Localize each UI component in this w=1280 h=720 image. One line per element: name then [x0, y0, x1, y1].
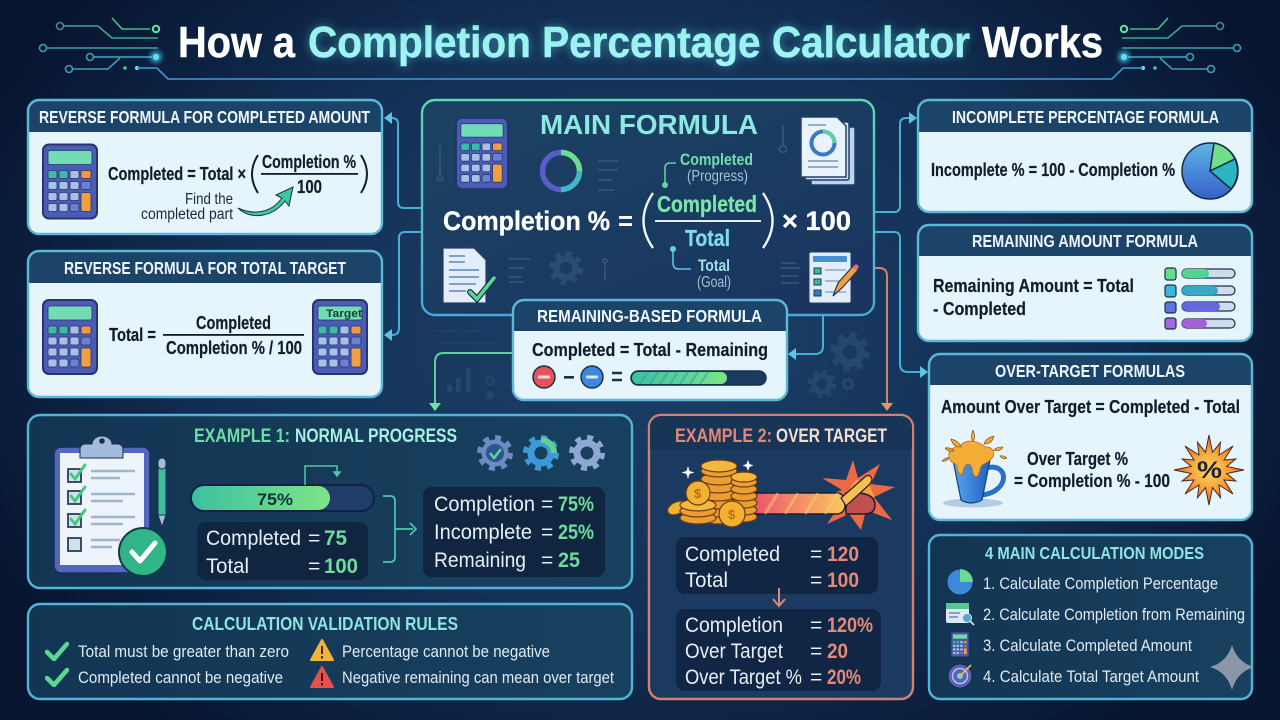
values box: results: 20: [827, 640, 848, 663]
completed callout: [662, 150, 753, 188]
arrow: down: [773, 588, 785, 606]
panel: over-target formulas: [929, 354, 1252, 520]
rule: percentage not negative: Percentage cannot be negative: [342, 642, 550, 661]
connector arrow: main to over-target: [874, 232, 928, 378]
rule: negative remaining: Negative remaining can mean over target: [342, 668, 614, 687]
values box: results: =: [541, 549, 553, 572]
values box: results: Over Target: [685, 640, 783, 663]
values box: results: 75%: [558, 493, 594, 516]
values box: inputs: =: [308, 527, 320, 550]
icon: green check badge: [119, 528, 167, 576]
title: How a: [178, 18, 295, 67]
heading: 4 MAIN CALCULATION MODES: [985, 543, 1204, 563]
values box: results: =: [541, 521, 553, 544]
arrow: small bar connector: [305, 466, 340, 485]
icon: percent burst: %: [1197, 457, 1222, 484]
values box: inputs: Completed: [206, 527, 301, 550]
main formula expression: [443, 191, 851, 251]
values box: inputs: 120: [827, 543, 859, 566]
panel: reverse formula for total target: [28, 251, 382, 397]
title: Completion Percentage Calculator: [308, 18, 970, 67]
panel heading: OVER-TARGET FORMULAS: [995, 361, 1185, 381]
heading: MAIN FORMULA: [540, 109, 758, 140]
heading: CALCULATION VALIDATION RULES: [192, 614, 458, 634]
connector arrow: main to incomplete: [874, 112, 917, 212]
panel heading: REVERSE FORMULA FOR TOTAL TARGET: [64, 258, 346, 278]
formula: Completed = Total - Remaining: [532, 340, 768, 360]
progress bar: [631, 371, 766, 385]
values box: results: =: [810, 614, 822, 637]
faint decoration lines: [438, 125, 800, 283]
panel heading: REMAINING-BASED FORMULA: [537, 306, 762, 326]
icon: explosion: [822, 460, 895, 530]
panel heading: REVERSE FORMULA FOR COMPLETED AMOUNT: [39, 107, 370, 127]
formula: Remaining Amount = Total: [933, 276, 1134, 296]
values box: results: 120%: [827, 614, 873, 637]
values box: results: Completion: [434, 493, 535, 516]
title: Completion Percentage Calculator: [308, 18, 970, 67]
main formula expression: =: [618, 206, 633, 236]
formula: 100: [297, 177, 322, 197]
connector arrow: main to example 2: [875, 268, 893, 411]
formula: Over Target %: [1027, 449, 1128, 469]
mode 3: 3. Calculate Completed Amount: [983, 636, 1192, 655]
faint background gears and chart: [435, 331, 867, 399]
main formula expression: × 100: [782, 206, 851, 236]
annotation: [141, 191, 234, 223]
panel: example 1 normal progress: [28, 415, 632, 588]
icon: subtraction equation: [533, 366, 622, 388]
title: Works: [982, 18, 1103, 67]
formula: Incomplete % = 100 - Completion %: [931, 160, 1175, 180]
icon: coins: $: [694, 486, 702, 501]
overflowing progress bar: [750, 476, 872, 514]
values box: results: Completion: [685, 614, 783, 637]
decorative header circuits left: [40, 18, 640, 79]
formula: Completed = Total ×: [108, 164, 246, 184]
arrow: bracket to results: [383, 496, 416, 562]
mode 2: [946, 603, 1245, 625]
mode 4: [948, 664, 1199, 688]
icon: calculator: [43, 144, 97, 218]
values box: results: Remaining: [434, 549, 526, 572]
icon: checklist and pencil: [809, 252, 858, 303]
icon: overflowing mug: [942, 430, 1007, 508]
decorative header circuits right: [640, 18, 1240, 79]
main formula expression: Completed: [657, 191, 757, 217]
values box: inputs: Total: [685, 569, 728, 592]
formula: [1014, 449, 1170, 491]
faint gear: [551, 253, 581, 283]
heading: EXAMPLE 1:: [194, 426, 290, 447]
values box: results: [676, 609, 881, 691]
values box: results: Incomplete: [434, 521, 532, 544]
icon: target calculator: [313, 300, 367, 374]
panel heading: INCOMPLETE PERCENTAGE FORMULA: [952, 107, 1219, 127]
icon: pie chart: [1182, 143, 1238, 199]
arrow: green curve: [238, 187, 293, 216]
panel: remaining amount formula: [918, 225, 1252, 341]
formula: Total =: [109, 325, 156, 345]
panel: calculation validation rules: [28, 604, 632, 699]
values box: inputs: Total: [206, 555, 249, 578]
icon: clipboard: [54, 436, 150, 573]
panel: remaining-based formula: [513, 300, 787, 400]
icon: calculator: [456, 118, 508, 189]
formula: - Completed: [933, 299, 1026, 319]
heading: EXAMPLE 2:: [675, 426, 772, 447]
values box: inputs: 100: [324, 555, 358, 578]
values box: results: [423, 487, 605, 577]
panel: reverse formula for completed amount: [28, 100, 382, 234]
heading: OVER TARGET: [776, 426, 887, 447]
main formula expression: Completion %: [443, 206, 610, 236]
formula: = Completion % - 100: [1014, 471, 1170, 491]
values box: results: 25: [558, 549, 580, 572]
annotation: Find the: [185, 191, 233, 208]
values box: results: 20%: [827, 666, 861, 689]
icon: coins: [665, 460, 757, 527]
connector arrow: main to reverse completed: [384, 112, 422, 208]
formula: Amount Over Target = Completed - Total: [941, 397, 1240, 417]
mode 1: 1. Calculate Completion Percentage: [983, 574, 1218, 593]
connector arrow: main to reverse total: [384, 232, 422, 341]
progress bar 75%: [191, 485, 374, 511]
mode 2: 2. Calculate Completion from Remaining: [983, 605, 1245, 624]
heading: NORMAL PROGRESS: [295, 426, 457, 447]
values box: results: =: [541, 493, 553, 516]
formula: Completed: [196, 313, 271, 333]
values box: inputs: =: [810, 543, 822, 566]
formula: [108, 152, 367, 197]
rule: completed not negative: Completed cannot be negative: [78, 668, 283, 687]
mode 3: [951, 632, 1192, 657]
panel: main formula: [422, 100, 874, 315]
heading: [675, 426, 887, 447]
values box: inputs: 75: [324, 527, 347, 550]
main formula expression: Total: [685, 225, 730, 251]
icon: donut chart: [542, 152, 580, 190]
total callout: [670, 246, 731, 291]
icon: target calculator: Target: [326, 308, 362, 320]
values box: results: 25%: [558, 521, 594, 544]
icon: coins: $: [728, 507, 736, 522]
values box: inputs: 100: [827, 569, 859, 592]
panel: incomplete percentage formula: [918, 100, 1252, 212]
values box: inputs: Completed: [685, 543, 780, 566]
icon: list bars: [1165, 268, 1235, 329]
values box: results: Over Target %: [685, 666, 802, 689]
total callout: Total: [698, 256, 730, 275]
values box: inputs: =: [810, 569, 822, 592]
connector arrow: main to remaining-based: [788, 315, 823, 360]
formula: [933, 276, 1134, 319]
icon: sparkle watermark: [1210, 645, 1254, 690]
icon: calculator: [43, 300, 97, 374]
annotation: completed part: [141, 206, 234, 223]
mode 1: [947, 569, 1218, 595]
values box: inputs: [676, 537, 878, 594]
formula: Completion %: [262, 152, 356, 172]
values box: results: =: [810, 640, 822, 663]
icon: percent burst: [1174, 435, 1244, 505]
total callout: (Goal): [697, 274, 731, 291]
panel: example 2 over target: [649, 415, 913, 699]
progress bar 75%: 75%: [257, 490, 293, 509]
connector arrow: remaining-based to example 1: [429, 353, 513, 411]
formula: [109, 313, 304, 358]
icon: document with check: [443, 248, 494, 303]
completed callout: Completed: [680, 150, 753, 169]
values box: results: =: [810, 666, 822, 689]
icon: stacked report: [801, 117, 855, 185]
values box: inputs: =: [308, 555, 320, 578]
values box: inputs: [197, 522, 368, 580]
mode 4: 4. Calculate Total Target Amount: [983, 667, 1199, 686]
icon: gears: [480, 438, 602, 468]
panel: four calculation modes: [929, 535, 1252, 699]
panel heading: REMAINING AMOUNT FORMULA: [972, 231, 1198, 251]
rule: total greater than zero: Total must be greater than zero: [78, 642, 289, 661]
completed callout: (Progress): [687, 168, 748, 185]
heading: [194, 426, 457, 447]
icon: pen: [158, 458, 166, 527]
formula: Completion % / 100: [166, 338, 302, 358]
